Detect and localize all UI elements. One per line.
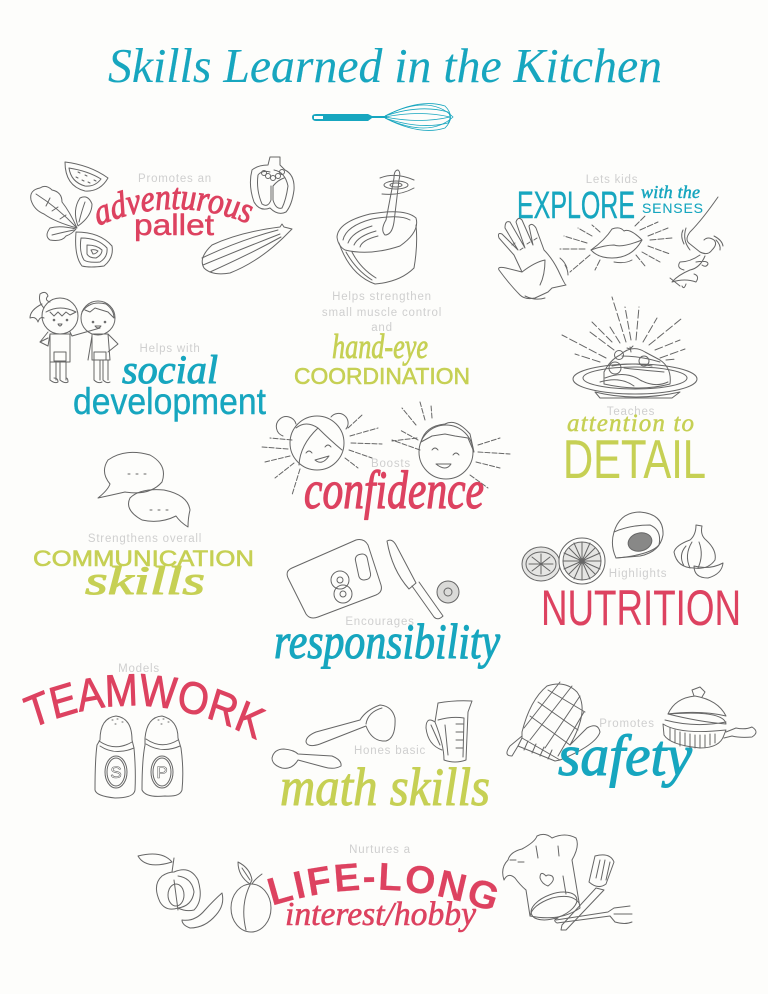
heading: with the: with the [641,182,700,202]
icon: fork [555,906,632,924]
icon: citrus slices [522,538,605,584]
icon: salt and pepper shakers: S [110,763,122,782]
icon: zucchini [202,224,292,274]
icon: whisk [312,104,453,130]
icon: measuring cup [306,705,395,746]
label: promotes: Promotes [599,718,655,730]
icon: garlic [674,525,723,578]
heading: adventurous: adventurous [96,188,253,226]
label: teaches: Teaches [607,406,655,418]
panel: life-long interest/hobby [138,834,632,933]
heading: responsibility: responsibility [274,613,501,669]
girl [42,298,78,334]
icon: boy face with rays [392,402,510,488]
heading: social: social [122,347,218,392]
heading: explore: EXPLORE [517,185,635,227]
label: strengthens overall: Strengthens overall [88,533,202,545]
heading: interest/hobby: interest/hobby [285,896,477,933]
icon: bell pepper [250,157,294,213]
label: helps strengthen: small muscle control [322,307,442,319]
panel: social development [30,292,267,422]
icon: salt and pepper shakers: P [156,763,168,782]
icon: peach with leaf [231,862,271,932]
panel: safety [507,682,756,788]
label: helps strengthen: and [371,322,393,334]
heading: coordination: COORDINATION [294,363,470,389]
label: helps strengthen [322,291,442,334]
icon: hand [498,218,568,299]
icon: cutting board and knife [287,540,459,619]
heading: skills: skills [85,558,205,603]
heading: confidence: confidence [304,460,484,520]
icon: girl face with rays [262,413,382,495]
heading: pallet: pallet [134,209,215,242]
heading: senses: SENSES [642,200,703,216]
icon: spatula [561,855,614,930]
icon: pot with lid [663,687,756,748]
heading: teamwork: TEAMWORK [22,674,266,740]
heading: attention to: attention to [567,410,694,437]
icon: measuring jug [426,701,472,762]
label: hones basic: Hones basic [354,745,426,757]
heading: development: development [73,381,267,422]
icon: avocado [612,512,663,558]
icon: apple half [138,854,200,911]
panel: responsibility [274,540,501,669]
label: nurtures a: Nurtures a [349,844,411,856]
label: promotes an: Promotes an [138,173,212,185]
icon: beet with leaves [31,186,112,267]
panel: hand-eye coordination [294,170,470,389]
heading: communication: COMMUNICATION [33,546,254,571]
boy [81,301,115,335]
icon: chef hat [503,834,581,925]
panel: confidence [262,402,510,520]
panel: attention to detail [562,297,706,490]
icon: watermelon [65,162,108,191]
label: lets kids: Lets kids [586,174,638,186]
title: Skills Learned in the Kitchen [108,38,662,93]
icon: nose with scent swirls [670,197,723,288]
panel: math skills [272,701,490,817]
heading: life-long: LIFE-LONG [267,862,498,909]
heading: detail: DETAIL [563,428,706,490]
icon: measuring spoon [272,749,341,768]
icon: lips with rays [560,216,672,272]
label: highlights: Highlights [609,568,667,580]
panel: explore with the senses [498,174,723,299]
icon: salt and pepper shakers [95,716,183,798]
heading: safety: safety [558,723,692,788]
icon: oven mitt [507,682,600,761]
panel: teamwork [22,663,266,798]
label: encourages: Encourages [345,616,415,628]
label: helps with: Helps with [139,343,201,355]
icon: chili pepper [182,893,223,928]
label: models: Models [118,663,160,675]
panel: nutrition [522,512,741,636]
icon: pasta plate with rays [562,297,697,398]
icon: two kids in aprons [30,292,118,383]
panel: adventurous pallet [30,156,295,274]
panel: communication skills [33,452,254,603]
label: boosts: Boosts [371,458,411,470]
heading: hand-eye: hand-eye [332,327,428,366]
icon: speech bubbles [98,452,190,527]
heading: math skills: math skills [280,757,490,817]
label: helps strengthen: Helps strengthen [332,291,432,303]
icon: mixing bowl with spoon [337,170,417,284]
